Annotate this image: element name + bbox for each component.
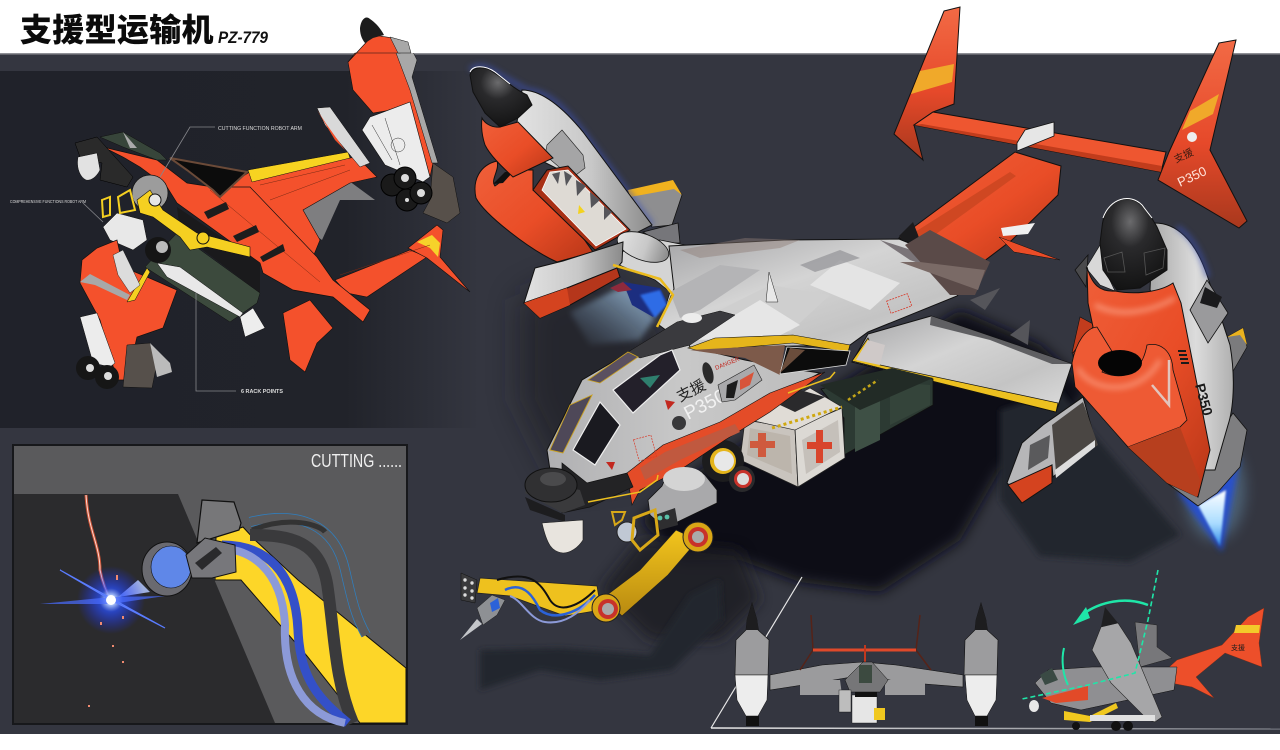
callout: cutting function robot arm: CUTTING FUNCTION ROBOT ARM <box>218 126 302 132</box>
title: 支援型运输机 <box>20 5 214 51</box>
right nacelle exhaust glow <box>1185 440 1245 540</box>
right wing pod <box>1007 397 1098 503</box>
callout: 6 rack points: 6 RACK POINTS <box>241 389 283 395</box>
wing top antenna <box>766 272 778 302</box>
underside: tail fin lower <box>283 300 333 372</box>
tail yellow stripe <box>911 64 954 94</box>
yellow overhang edge <box>688 335 850 352</box>
underside: lower grey fin <box>150 343 172 377</box>
right intake ring highlight <box>1078 360 1160 387</box>
underside: lower brown housing <box>123 343 157 388</box>
inset: grey housing <box>197 500 241 543</box>
brown overhang <box>690 345 785 375</box>
underside: grey wing spikes <box>297 178 375 240</box>
nose strut <box>562 463 633 513</box>
white medical crate <box>740 388 845 487</box>
front view: right nacelle <box>964 603 998 726</box>
near wing dark upper panel <box>930 316 1072 364</box>
right tail fin <box>1158 40 1247 228</box>
top cockpit window <box>613 350 680 413</box>
far tail join block <box>905 230 990 295</box>
underside: claw <box>240 308 265 337</box>
wing top red marking <box>887 294 912 313</box>
left nacelle blue halo <box>470 66 652 225</box>
right nacelle left rim <box>1086 245 1115 291</box>
fuselage markings: DANGER <box>715 356 741 372</box>
left nacelle: far fin <box>628 180 682 243</box>
underside: white engine <box>362 102 430 182</box>
right nacelle markings: P350 <box>1192 382 1216 418</box>
left exhaust glow <box>570 285 655 345</box>
side view: tilted nacelle <box>1092 623 1162 722</box>
underside: centre wheel <box>145 237 171 263</box>
nose turret <box>525 468 585 522</box>
fuselage markings <box>606 356 741 470</box>
ground shadow of aircraft <box>480 270 1180 690</box>
underside: tail boom and stabiliser <box>335 250 427 297</box>
orthographic views frame <box>711 577 1280 729</box>
subtitle: PZ-779 <box>218 28 268 47</box>
underside: lower gear <box>80 313 115 367</box>
inset: dark cable <box>250 535 353 723</box>
cockpit fuselage silver <box>547 323 820 490</box>
right intake hole <box>1098 350 1142 376</box>
callout: cutting function robot arm <box>160 126 302 177</box>
right nacelle behind parts <box>1072 255 1247 373</box>
underside: white sensor <box>77 153 100 180</box>
wing root yellow edge <box>613 265 673 327</box>
inset: blue cable <box>222 545 348 723</box>
front cockpit window <box>550 395 592 453</box>
title block <box>0 0 1280 53</box>
right fin yellow stripe <box>1182 94 1219 130</box>
far tail fin left <box>894 7 960 160</box>
stabiliser white block <box>1017 122 1054 151</box>
left exhaust blue cavity <box>623 282 667 317</box>
wing top panel tones <box>670 238 977 340</box>
left spinner <box>470 68 532 127</box>
main intake <box>780 347 850 374</box>
callout: comprehensive functions robot arm: COMPREHENSIVE FUNCTIONS ROBOT ARM <box>10 199 86 204</box>
underside: green belly <box>145 233 260 322</box>
inset: dark wall <box>14 494 275 723</box>
underside: white cutter rail <box>157 263 243 317</box>
right upper cowl highlight <box>1095 298 1175 312</box>
sensor pod <box>648 467 717 530</box>
green cargo crate <box>820 368 933 455</box>
right fin roundel <box>1187 132 1197 142</box>
yellow bracket and gear <box>612 510 658 550</box>
tail boom <box>899 152 1061 268</box>
underside: lower wheels <box>76 356 119 389</box>
left intake hole <box>493 172 513 184</box>
right nacelle lower shade <box>1128 427 1200 497</box>
main wing top centre <box>659 239 978 348</box>
underside: white robot arm <box>103 213 147 250</box>
side view: nose sensor <box>1029 700 1039 712</box>
underside: upper wheels <box>381 167 432 211</box>
side view: back nacelle <box>1135 622 1172 667</box>
right fin marking: P350 <box>1175 163 1209 190</box>
nacelle overlap on title band <box>348 17 411 62</box>
right spinner <box>1100 199 1167 290</box>
underside: white louvre panel <box>113 250 140 293</box>
front view: centre fuselage <box>839 662 888 723</box>
side view: orange tail: 支援 <box>1231 643 1245 652</box>
inset: grey connector <box>186 538 236 578</box>
front view: left nacelle <box>735 603 769 726</box>
right fin marking: 支援 <box>1172 145 1195 166</box>
left intake orange <box>475 161 593 262</box>
underside: rack pylons <box>204 202 285 262</box>
underside: yellow strut <box>127 268 150 302</box>
left nacelle grey box <box>545 130 585 178</box>
arm: forearm <box>477 578 601 616</box>
inset: caption: CUTTING ...... <box>311 451 402 471</box>
underside: yellow robot arm <box>137 190 250 257</box>
right fin marking <box>1172 145 1209 190</box>
robot arm <box>460 522 713 640</box>
side view: orange tail <box>1155 608 1264 698</box>
callout: 6 rack points <box>196 293 283 395</box>
left wing pod grey <box>524 242 623 303</box>
wing spikes <box>970 288 1030 345</box>
left upper cowl <box>482 118 553 177</box>
underside: lower nacelle <box>80 240 177 380</box>
left nacelle white body <box>517 90 652 235</box>
arm: cutter tool <box>460 595 505 640</box>
spinner triangle panels <box>1104 248 1165 275</box>
shadow of robot arm <box>480 580 722 690</box>
inset: blue chuck <box>142 542 192 596</box>
right grey vent box <box>1190 280 1228 343</box>
underside: upper nacelle <box>348 35 433 177</box>
horizontal stabiliser <box>914 112 1166 172</box>
left wing pod orange <box>524 268 620 318</box>
side cockpit window <box>573 402 620 465</box>
underside: right wing <box>227 157 377 257</box>
inset: cutting flare <box>40 566 165 634</box>
underside: tail yellow mark <box>417 235 440 257</box>
inset: spark trail <box>86 495 111 600</box>
top spine <box>628 311 735 358</box>
front view: wing and tail <box>770 615 963 695</box>
left wing pod hub <box>613 226 673 268</box>
fuselage intake nub <box>718 365 762 402</box>
arm: elbow joint <box>592 594 620 622</box>
inset: yellow arm <box>215 527 406 723</box>
underside: canopy <box>170 158 247 197</box>
arm: lamp pad <box>461 573 477 603</box>
side view: landing gear and arm <box>1064 703 1155 731</box>
left wing root <box>612 240 700 325</box>
near wing <box>852 316 1072 412</box>
boom tail scoop <box>899 222 920 245</box>
underside: brown housing <box>423 163 460 223</box>
arm: cables <box>497 576 595 622</box>
underside: white wing panel <box>317 107 370 167</box>
inset: cutter tip <box>118 580 150 597</box>
right nacelle white body <box>1150 223 1233 470</box>
fuselage orange belly <box>627 372 825 505</box>
spine roundel <box>682 313 702 323</box>
roof window <box>588 352 638 383</box>
underside: grey intake band <box>80 274 130 300</box>
inset panel: cutting close-up <box>13 445 407 724</box>
right thruster blue flame <box>1178 458 1240 552</box>
yellow rail <box>588 475 658 502</box>
callout: comprehensive functions robot arm <box>10 199 103 222</box>
underside: tail fin upper <box>408 225 470 292</box>
left white louvre panel <box>533 166 630 250</box>
arm: shoulder joint <box>683 522 713 552</box>
underside: cockpit top <box>100 132 167 160</box>
fuselage markings: P350 <box>681 386 730 424</box>
fuselage vent <box>700 361 716 385</box>
fuselage markings: 支援 <box>674 377 709 406</box>
underside: black rack bay <box>177 207 260 293</box>
arm: upper link <box>603 530 698 616</box>
panel: underside line drawing <box>0 35 480 428</box>
underside: grey sensor drum <box>132 175 168 211</box>
near wing yellow edge <box>852 338 1058 412</box>
underside: fuselage <box>103 147 370 322</box>
right nacelle markings <box>1152 350 1216 418</box>
tilt axis and arrows <box>1022 570 1158 699</box>
nose white sensor <box>542 520 583 553</box>
inset: black connector <box>195 547 222 570</box>
underside: panel lines <box>210 165 430 282</box>
right nacelle blue halo <box>1177 227 1208 277</box>
right thruster housing <box>1167 413 1247 506</box>
inset: sparks <box>88 575 124 707</box>
inset: lilac cable <box>212 549 345 723</box>
underside: black nose <box>75 137 133 187</box>
underside: yellow leading edge <box>248 152 350 182</box>
yellow rail upper <box>788 372 835 393</box>
side view: nacelle tip <box>1101 607 1118 627</box>
underside: nacelle grey band <box>390 37 438 163</box>
small under-boom fins <box>999 223 1060 260</box>
right lower intake ring <box>1072 327 1187 447</box>
landing gear wheels <box>702 440 755 492</box>
side view: fuselage <box>1035 667 1177 710</box>
inset: outer cable <box>250 518 366 635</box>
right nacelle orange body <box>1073 267 1210 497</box>
